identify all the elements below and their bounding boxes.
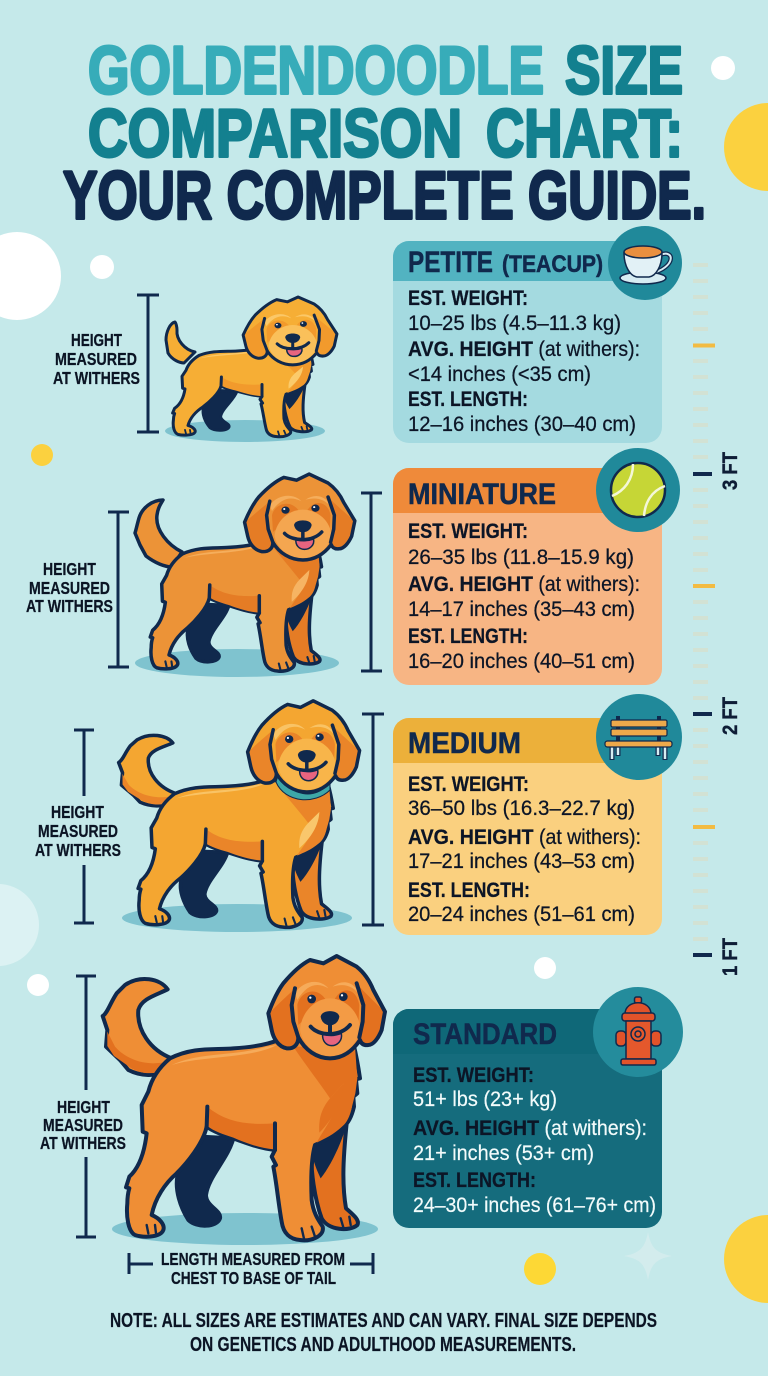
- dog: standard: [103, 956, 385, 1245]
- panel: petite: EST. LENGTH:: [408, 388, 528, 411]
- title: GOLDENDOODLE: [88, 32, 544, 108]
- panel: standard: 24–30+ inches (61–76+ cm): [413, 1194, 656, 1217]
- dog: medium: [119, 701, 360, 932]
- panel: medium: 20–24 inches (51–61 cm): [408, 903, 635, 926]
- panel: standard: STANDARD: [413, 1018, 557, 1051]
- title: COMPARISON: [88, 96, 462, 172]
- panel: standard: 21+ inches (53+ cm): [413, 1142, 594, 1165]
- panel: petite: AVG. HEIGHT (at withers):: [408, 338, 640, 361]
- panel: standard: [393, 987, 683, 1228]
- height ruler: 1 FT: [719, 938, 742, 976]
- collar: [276, 775, 330, 800]
- length marker: CHEST TO BASE OF TAIL: [171, 1268, 336, 1288]
- panel: miniature: [393, 448, 680, 685]
- panel: petite: 12–16 inches (30–40 cm): [408, 413, 636, 436]
- panel: miniature: 14–17 inches (35–43 cm): [408, 598, 635, 621]
- height markers: medium: MEASURED: [38, 821, 118, 841]
- panel: medium: MEDIUM: [408, 727, 521, 760]
- height marker: standard: [40, 976, 126, 1237]
- panel: standard: 51+ lbs (23+ kg): [413, 1088, 557, 1111]
- length marker: LENGTH MEASURED FROM: [161, 1249, 345, 1269]
- height markers: miniature: AT WITHERS: [26, 596, 113, 616]
- height marker: petite: HEIGHT: [71, 330, 122, 350]
- panel: petite: EST. WEIGHT:: [408, 287, 528, 310]
- panel: petite: 10–25 lbs (4.5–11.3 kg): [408, 312, 621, 335]
- height ruler: 3 FT: [719, 452, 742, 490]
- note: [110, 1310, 657, 1356]
- height marker: petite: [53, 295, 159, 432]
- title: SIZE: [565, 32, 683, 108]
- note: ON GENETICS AND ADULTHOOD MEASUREMENTS.: [190, 1334, 576, 1356]
- title: CHART:: [486, 96, 683, 172]
- panel: miniature: AVG. HEIGHT (at withers):: [408, 573, 640, 596]
- panel: standard: EST. LENGTH:: [413, 1169, 536, 1192]
- height ruler: 2 FT: [719, 697, 742, 735]
- title: [63, 32, 706, 234]
- height markers: medium: AT WITHERS: [35, 840, 121, 860]
- height marker: standard: MEASURED: [43, 1115, 123, 1135]
- height marker: petite: AT WITHERS: [53, 368, 140, 388]
- panel: miniature: EST. WEIGHT:: [408, 520, 528, 543]
- height marker: standard: HEIGHT: [57, 1097, 110, 1117]
- icon: fire hydrant: [593, 987, 683, 1077]
- panel: standard: EST. WEIGHT:: [413, 1064, 534, 1087]
- panel: petite: (TEACUP): [502, 251, 603, 278]
- icon: tennis ball: [596, 448, 680, 532]
- icon: teacup: [608, 226, 682, 300]
- height marker: petite: MEASURED: [55, 349, 137, 369]
- panel: petite: [393, 226, 682, 443]
- dog: petite: [165, 297, 337, 442]
- panel: miniature: MINIATURE: [408, 478, 556, 511]
- height markers: medium: HEIGHT: [51, 802, 104, 822]
- height markers: miniature: HEIGHT: [43, 559, 96, 579]
- dog: miniature: [135, 474, 355, 677]
- icon: bench: [596, 694, 682, 780]
- panel: petite: PETITE: [408, 246, 493, 279]
- height markers: miniature: MEASURED: [29, 578, 110, 598]
- panel: standard: AVG. HEIGHT (at withers):: [413, 1117, 647, 1140]
- panel: medium: AVG. HEIGHT (at withers):: [408, 826, 641, 849]
- panel: petite: <14 inches (<35 cm): [408, 363, 591, 386]
- height markers: medium: [35, 714, 384, 925]
- height markers: miniature: [26, 493, 382, 671]
- panel: miniature: EST. LENGTH:: [408, 625, 528, 648]
- panel: medium: 17–21 inches (43–53 cm): [408, 850, 635, 873]
- length marker: [129, 1249, 373, 1288]
- panel: medium: EST. WEIGHT:: [408, 773, 529, 796]
- panel: medium: [393, 694, 682, 935]
- panel: miniature: 16–20 inches (40–51 cm): [408, 650, 635, 673]
- panel: miniature: 26–35 lbs (11.8–15.9 kg): [408, 546, 634, 569]
- panel: medium: EST. LENGTH:: [408, 879, 530, 902]
- height marker: standard: AT WITHERS: [40, 1133, 126, 1153]
- height ruler: [693, 265, 742, 976]
- panel: medium: 36–50 lbs (16.3–22.7 kg): [408, 797, 635, 820]
